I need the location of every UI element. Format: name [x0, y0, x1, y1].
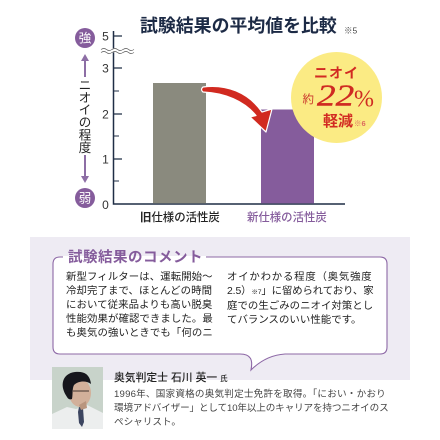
axis title: 程 [79, 128, 92, 142]
comment text: left column: において従来品よりも高い脱臭 [66, 300, 212, 311]
comment section background [30, 237, 410, 380]
expert bio [114, 388, 389, 428]
axis title: 度 [79, 140, 91, 155]
comment text: right column: オイかわかる程度（奥気強度 [227, 272, 372, 283]
callout: 22% reduction: 約 [302, 92, 314, 106]
callout: 22% reduction: 軽減 [323, 112, 353, 130]
axis title: の [79, 116, 91, 130]
y axis labels [102, 30, 109, 212]
comment text: left column: 性能効果が確認できました。最 [66, 314, 213, 325]
badge: weak: 弱 [79, 192, 91, 206]
axis title: ニ [79, 78, 91, 92]
bar: old [153, 83, 206, 203]
arrow: old to new [202, 86, 272, 132]
comment text: left column: 新型フィルターは、運転開始～ [66, 272, 213, 283]
comment text: right column: 2.5）※7」に留められており、家 [227, 286, 374, 297]
title: ※5 [344, 26, 358, 36]
expert name: 奥気判定士 石川 英一 氏 [114, 372, 228, 384]
bar label: old: 旧仕様の活性炭 [140, 210, 220, 224]
expert bio: 環境アドバイザー」として10年以上のキャリアを持つニオイのス [114, 403, 389, 414]
bar label: new: 新仕様の活性炭 [247, 210, 327, 224]
comment heading: 試験結果のコメント [68, 248, 203, 266]
expert portrait [52, 367, 103, 429]
title: 試験結果の平均値を比較 [140, 16, 337, 36]
callout: 22% reduction: ※6 [354, 119, 366, 128]
arrow: up [81, 54, 89, 77]
comment text: left column: 冷却完了まで、ほとんどの時間 [66, 286, 212, 297]
bar: new [261, 110, 314, 203]
axis title: イ [79, 103, 91, 117]
badge: weak [75, 188, 95, 208]
expert bio: 1996年、国家資格の奥気判定士免許を取得。「におい・かおり [114, 389, 386, 400]
arrow: down [81, 155, 89, 183]
callout: 22% reduction: 22 [317, 78, 354, 113]
y axis labels: 5 [102, 30, 109, 44]
comment text: right column: てバランスのいい性能です。 [227, 315, 361, 326]
y axis labels: 2 [102, 108, 109, 122]
comment text: left column [66, 271, 213, 339]
axis title [79, 78, 92, 155]
axis break [101, 48, 134, 54]
badge: strong [75, 28, 95, 48]
callout: 22% reduction [291, 52, 382, 143]
comment text: left column: も奥気の強いときでも「何のニ [66, 328, 213, 339]
y axis labels: 0 [102, 198, 109, 212]
badge: strong: 強 [79, 32, 92, 46]
y axis labels: 3 [102, 62, 109, 76]
axes [114, 31, 345, 204]
callout: 22% reduction: % [354, 86, 374, 112]
comment text: right column: 庭での生ごみのニオイ対策とし [227, 301, 373, 312]
comment speech bubble [53, 257, 387, 370]
callout: 22% reduction: ニオイ [314, 65, 359, 81]
y axis labels: 1 [102, 152, 109, 166]
comment text: right column [227, 271, 374, 326]
expert bio: ペシャリスト。 [114, 417, 181, 428]
axis title: オ [79, 91, 91, 105]
